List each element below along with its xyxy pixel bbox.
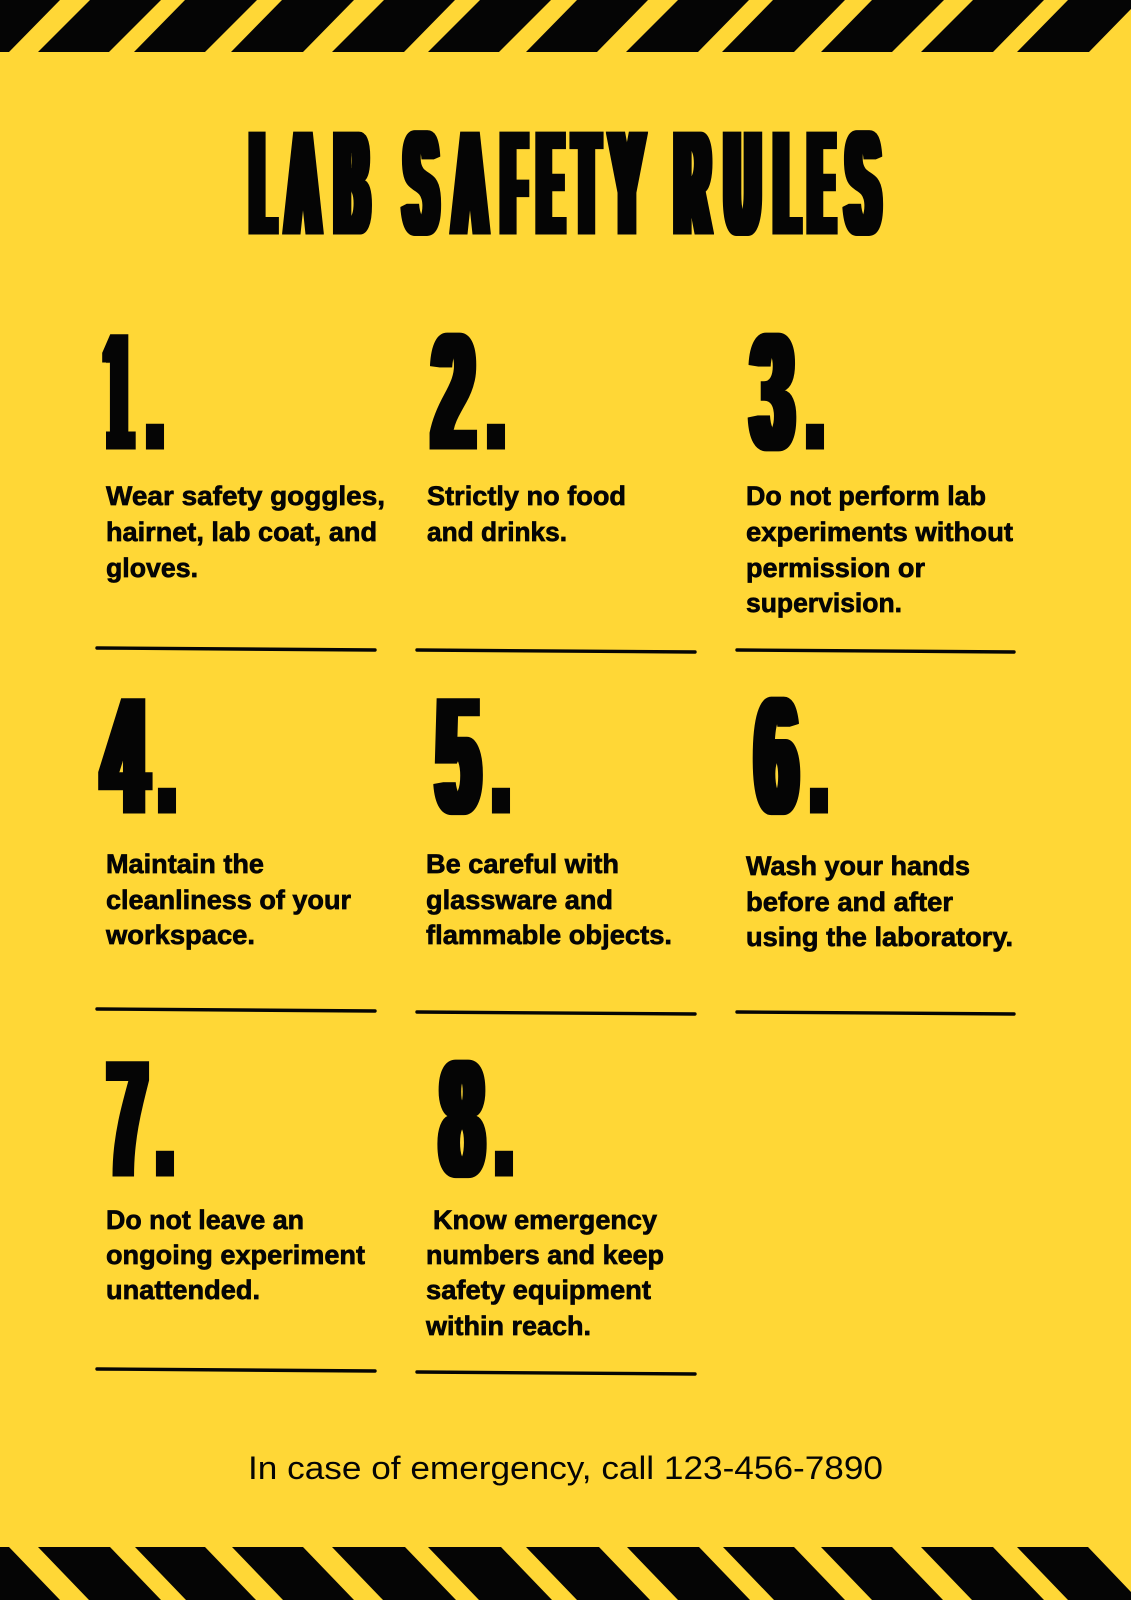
title: A [287, 101, 319, 266]
title: A [454, 101, 486, 266]
rule 2: . [490, 300, 502, 485]
rule 5 text: Be careful with [426, 849, 619, 879]
rule 2 text: Strictly no food [427, 481, 626, 511]
rule 2 [417, 300, 695, 652]
rule 3 text: permission or [746, 553, 925, 583]
text: S [847, 101, 879, 266]
rule 3 text [746, 481, 1013, 618]
rule 5 text: flammable objects. [426, 920, 672, 950]
rule 4 text: cleanliness of your [106, 885, 351, 915]
emergency contact line: In case of emergency, call 123-456-7890 [248, 1450, 883, 1486]
title: Y [611, 101, 642, 266]
rule 8: . [498, 1027, 510, 1212]
rule 6 text: using the laboratory. [746, 922, 1013, 952]
rule 2 divider [417, 650, 695, 652]
rule 6 [737, 664, 1014, 1014]
hazard stripes: bottom band [0, 1547, 1131, 1600]
title: L [776, 101, 798, 266]
rule 4 text [105, 849, 351, 950]
rule 3 [737, 300, 1014, 652]
rule 1: . [149, 300, 161, 485]
rule 7 text: ongoing experiment [106, 1240, 365, 1270]
title: T [575, 101, 598, 266]
rule 6 text [746, 851, 1013, 952]
rule 4 [97, 664, 375, 1011]
rule 1 [97, 300, 385, 650]
rule 4 text: workspace. [105, 920, 255, 950]
rule 6: . [813, 664, 825, 849]
number 4: 4 [103, 664, 147, 849]
rule 3 text: experiments without [746, 517, 1013, 547]
number 3: 3 [752, 300, 793, 485]
title: F [503, 101, 525, 266]
title: U [726, 101, 759, 266]
rule 1 text: Wear safety goggles, [106, 481, 385, 511]
rule 7 [97, 1027, 375, 1371]
title: E [810, 101, 833, 266]
rule 7 text: Do not leave an [106, 1205, 304, 1235]
number 1: 1 [105, 300, 131, 485]
rule 4 text: Maintain the [106, 849, 264, 879]
number 7: 7 [109, 1027, 146, 1212]
rule 1 text: hairnet, lab coat, and [106, 517, 377, 547]
rule 8 divider [417, 1372, 695, 1374]
rule 2 text: and drinks. [427, 517, 567, 547]
rule 3 text: Do not perform lab [746, 481, 986, 511]
number 1 [102, 334, 164, 450]
rule 1 text [106, 481, 385, 583]
rule 8 [417, 1027, 695, 1374]
rule 5 text [426, 849, 672, 950]
rule 7: . [159, 1027, 171, 1212]
rule 4: . [161, 664, 173, 849]
title: B [336, 101, 368, 266]
rule 3 divider [737, 650, 1014, 652]
rule 7 divider [97, 1369, 375, 1371]
rule 5 [417, 664, 695, 1014]
title: S [405, 101, 437, 266]
rule 5 text: glassware and [426, 885, 613, 915]
rule 7 text [106, 1205, 365, 1305]
rule 8 text: Know emergency [433, 1205, 657, 1235]
rule 5: . [495, 664, 507, 849]
number 6: 6 [756, 664, 797, 849]
rule 6 text: before and after [746, 887, 953, 917]
rule 1 divider [97, 648, 375, 650]
rule 3 text: supervision. [746, 588, 902, 618]
rule 8 text [425, 1205, 664, 1341]
rule 8 text: numbers and keep [426, 1240, 664, 1270]
title: E [539, 101, 562, 266]
rule 8 text: within reach. [425, 1311, 591, 1341]
number 5: 5 [437, 664, 479, 849]
hazard stripes: top band [0, 0, 1131, 52]
rule 5 divider [417, 1012, 695, 1014]
rule 8 text: safety equipment [426, 1275, 651, 1305]
rule 2 text [427, 481, 626, 547]
rule 1 text: gloves. [106, 553, 198, 583]
rule 6 divider [737, 1012, 1014, 1014]
number 8: 8 [441, 1027, 483, 1212]
rule 7 text: unattended. [106, 1275, 260, 1305]
rule 4 divider [97, 1009, 375, 1011]
rule 6 text: Wash your hands [746, 851, 970, 881]
title: L [252, 101, 274, 266]
number 2: 2 [433, 300, 474, 485]
rule 3: . [809, 300, 821, 485]
title: R [676, 101, 709, 266]
